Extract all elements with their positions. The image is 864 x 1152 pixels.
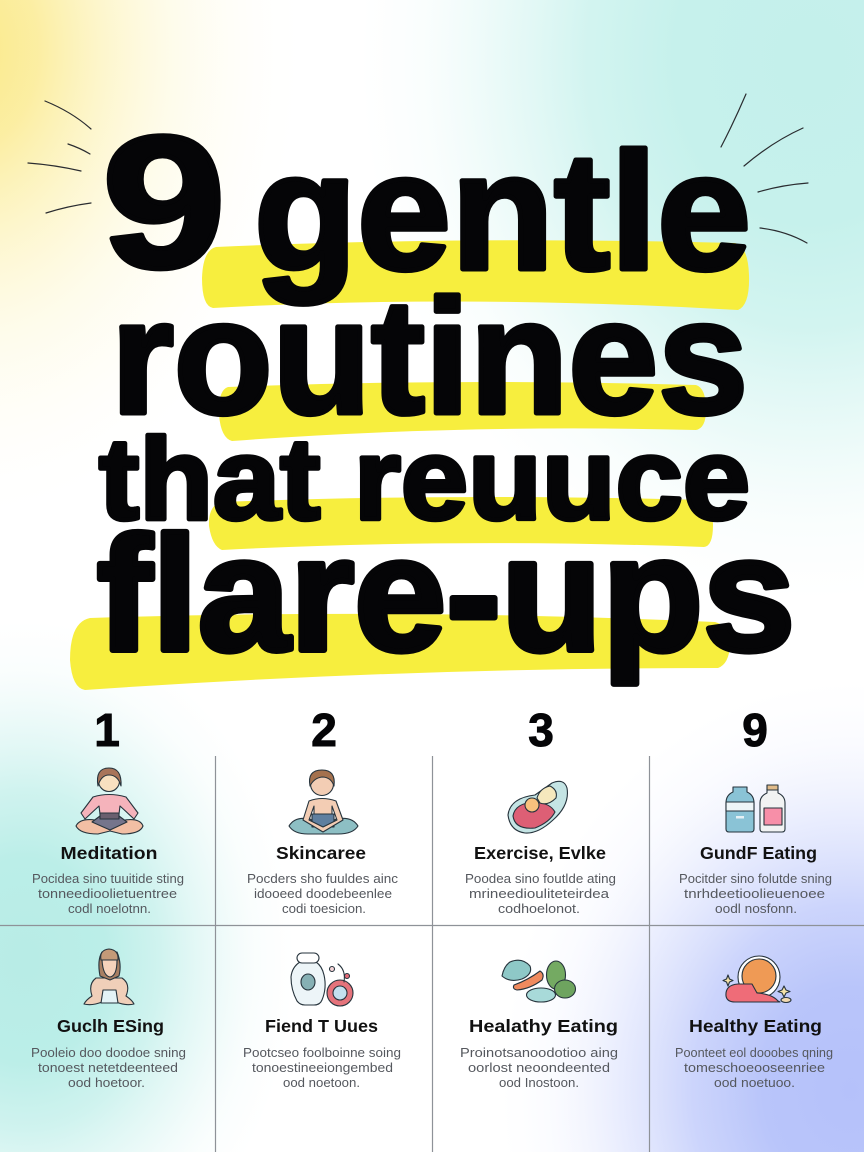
description: Pocders sho fuuldes ainc xyxy=(247,872,398,886)
icon: meditating person xyxy=(76,768,143,834)
card 1: meditation xyxy=(32,768,184,916)
description: Pocitder sino folutde sning xyxy=(679,872,832,886)
icon: resting figure and sun xyxy=(723,956,791,1002)
description: Pooleio doo doodoe sning xyxy=(31,1046,186,1060)
description xyxy=(247,872,398,916)
label: Healathy Eating xyxy=(469,1016,618,1036)
description: Poodea sino foutlde ating xyxy=(465,872,616,886)
description: tonoest netetdeenteed xyxy=(38,1061,178,1075)
title xyxy=(97,97,795,685)
card 8 xyxy=(675,956,833,1090)
description xyxy=(32,872,184,916)
description: idooeed doodebeenlee xyxy=(254,887,392,901)
description: codl noelotnn. xyxy=(68,902,151,916)
description: tonoestineeiongembed xyxy=(252,1061,393,1075)
description xyxy=(465,872,616,916)
title: flare-ups xyxy=(97,502,795,685)
description: ood hoetoor. xyxy=(68,1076,145,1090)
title: gentle xyxy=(254,119,751,305)
label: Exercise, Evlke xyxy=(474,843,606,863)
title: 9 xyxy=(102,97,226,307)
numbers: 3 xyxy=(528,704,554,756)
card 6 xyxy=(243,953,401,1090)
icon: bottles xyxy=(726,785,785,832)
card 3 xyxy=(465,781,616,916)
icon: vegetables xyxy=(502,960,576,1002)
yellow highlighter strokes xyxy=(70,240,749,690)
icon: seated person xyxy=(289,770,358,834)
label: Healthy Eating xyxy=(689,1016,822,1036)
card 5 xyxy=(31,949,186,1090)
description: oodl nosfonn. xyxy=(715,902,797,916)
description: tonneedioolietuentree xyxy=(38,887,177,901)
description: Poonteet eol dooobes qning xyxy=(675,1046,833,1060)
description xyxy=(675,1046,833,1090)
description xyxy=(243,1046,401,1090)
numbers xyxy=(94,704,768,756)
icon: food bowl xyxy=(508,781,567,833)
title: routines xyxy=(111,265,748,448)
icon: jar and compact xyxy=(291,953,353,1006)
label: Meditation xyxy=(60,843,158,863)
grid lines xyxy=(0,756,864,1152)
description: ood noetuoo. xyxy=(714,1076,795,1090)
description: oorlost neoondeented xyxy=(468,1061,610,1075)
numbers: 2 xyxy=(311,704,337,756)
label: Guclh ESing xyxy=(57,1016,164,1036)
description xyxy=(31,1046,186,1090)
description: Proinotsanoodotioo aing xyxy=(460,1046,618,1060)
burst lines right xyxy=(721,94,808,243)
description: codhoelonot. xyxy=(498,902,580,916)
description: tnrhdeetioolieuenoee xyxy=(684,887,825,901)
card 4 xyxy=(679,785,832,916)
description: Pocidea sino tuuitide sting xyxy=(32,872,184,886)
description: codi toesicion. xyxy=(282,902,366,916)
description: ood Inostoon. xyxy=(499,1076,579,1090)
numbers: 9 xyxy=(742,704,768,756)
label: Skincaree xyxy=(276,843,366,863)
label: GundF Eating xyxy=(700,843,817,863)
card 7 xyxy=(460,960,618,1090)
description: tomeschoeooseenriee xyxy=(684,1061,825,1075)
card 2: skincare xyxy=(247,770,398,916)
description: Pootcseo foolboinne soing xyxy=(243,1046,401,1060)
title: that reuuce xyxy=(99,414,750,544)
description: ood noetoon. xyxy=(283,1076,360,1090)
burst lines left xyxy=(28,101,91,213)
description: mrineediouliteteirdea xyxy=(469,887,609,901)
icon: person portrait xyxy=(84,949,134,1005)
description xyxy=(460,1046,618,1090)
description xyxy=(679,872,832,916)
label: Fiend T Uues xyxy=(265,1016,378,1036)
numbers: 1 xyxy=(94,704,120,756)
